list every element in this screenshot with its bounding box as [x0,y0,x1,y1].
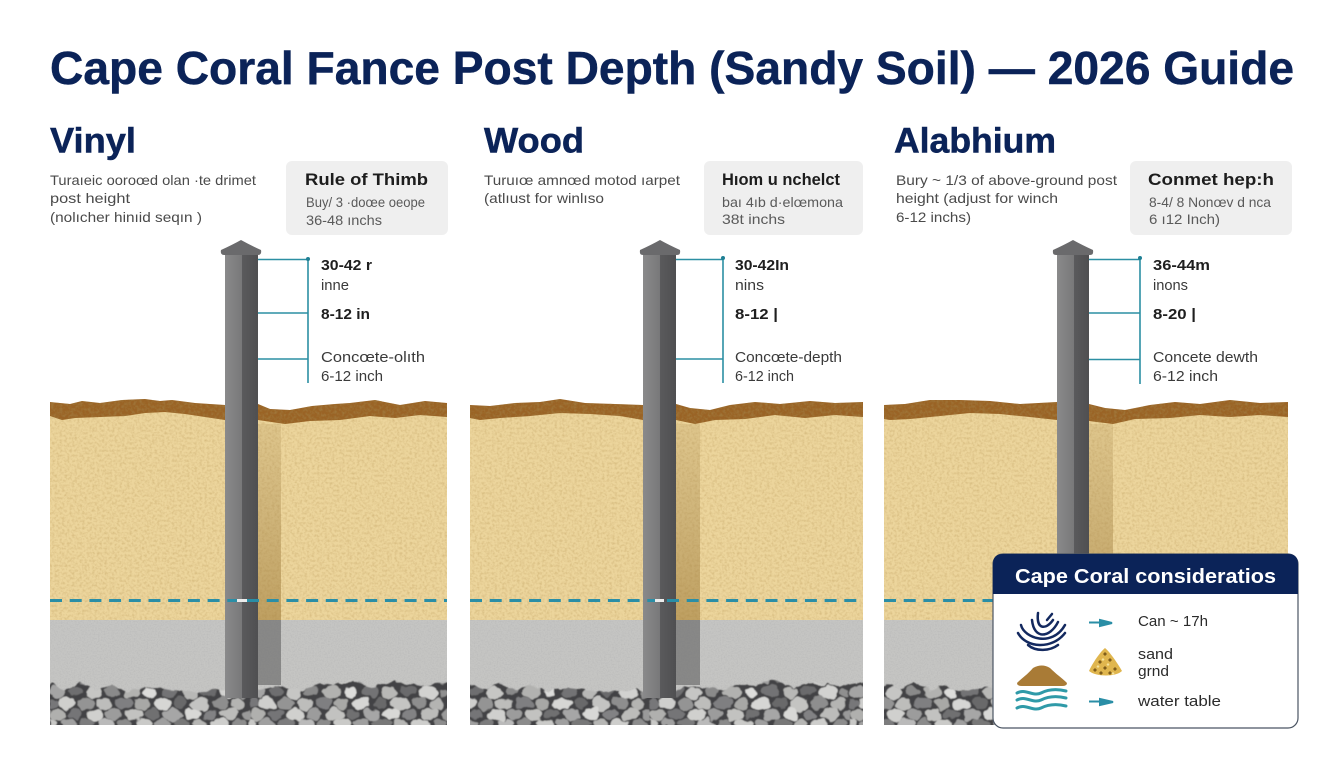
post [221,240,261,698]
dimension labels: nins [735,278,764,294]
dimension labels: 6-12 inch [321,369,383,385]
icon: sand pile [1089,648,1122,676]
panel: vinyl [40,122,450,730]
dimension labels [735,257,842,385]
description: aluminum: 6-12 inchs) [896,209,971,225]
description: aluminum: Bury ~ 1/3 of above-ground post [896,172,1117,188]
dimension labels: 6-12 inch [1153,369,1218,385]
callout: rule of thumb: 38t inchs [722,211,785,227]
icon: water waves [1017,690,1066,709]
card header [993,554,1298,594]
heading: aluminum: Alabhium [894,122,1056,160]
icon: soil mound [1017,666,1067,686]
dimension labels [1153,257,1258,385]
callout: rule of thumb [1130,161,1292,235]
dimension labels: 8-12 in [321,306,370,323]
card text: wind: Can ~ 17h [1138,613,1208,630]
panel: aluminum [874,122,1292,730]
arrow: water [1089,699,1113,705]
panel: cape coral considerations [993,554,1298,728]
dimension labels: 30-42In [735,257,789,274]
callout: rule of thumb: Rule of Thimb [305,170,428,189]
ground layers [40,399,450,730]
dimension labels [321,257,425,385]
post footing shadow [676,424,700,685]
dimension labels: Concœte-depth [735,350,842,366]
post [1053,240,1093,574]
description: wood [484,172,680,206]
description: vinyl [50,172,256,225]
arrow: wind [1089,620,1112,626]
panel: wood [460,122,870,730]
callout: rule of thumb: Hıom u nchelct [722,170,840,189]
ground layers [460,399,870,730]
card text: sand: sand [1138,646,1173,663]
heading: vinyl: Vinyl [50,122,136,160]
card text: sand: grnd [1138,663,1169,680]
dimension lines [258,257,310,383]
card text: water table: water table [1137,693,1221,710]
callout: rule of thumb [286,161,448,235]
post footing shadow [258,424,281,685]
dimension labels: inons [1153,278,1188,294]
icon: wind swirl [1018,613,1065,650]
heading: wood: Wood [484,122,584,160]
card heading: Cape Coral consideratios [1015,566,1276,588]
dimension labels: 8-12 | [735,306,778,323]
dimension labels: inne [321,278,349,294]
water table line [50,599,447,602]
callout: rule of thumb [704,161,863,235]
dimension lines [676,256,725,383]
dimension labels: 30-42 r [321,257,372,274]
dimension labels: 36-44m [1153,257,1210,274]
dimension lines [1089,256,1142,384]
water table line [884,599,995,602]
description: wood: Turuıœ amnœd motod ıarpet [484,172,680,188]
description: vinyl: Turaıeic ooroœd olan ·te drimet [50,172,256,188]
dimension labels: 6-12 inch [735,369,794,385]
callout: rule of thumb: Conmet hep:h [1148,170,1274,189]
description: vinyl: post height [50,190,130,206]
callout: rule of thumb: 36-48 ınchs [306,212,382,228]
callout: rule of thumb: 8-4/ 8 Nonœv d nca [1149,194,1271,210]
dimension labels: Concete dewth [1153,350,1258,366]
callout: rule of thumb: Buy/ 3 ·doœe oeope [306,194,425,210]
description: wood: (atlıust for winlıso [484,190,604,206]
description: vinyl: (nolıcher hinıid seqın ) [50,209,202,225]
description: aluminum [896,172,1117,225]
ground layers [874,400,1290,730]
dimension labels: Concœte-olıth [321,350,425,366]
water table line [470,599,863,602]
post [640,240,680,698]
card text: sand [1138,646,1173,680]
callout: rule of thumb: baı 4ıb d·elœmona [722,194,843,210]
title: Cape Coral Fance Post Depth (Sandy Soil) — 2026 Guide [50,42,1294,94]
callout: rule of thumb: 6 ı12 Inch) [1149,211,1220,227]
post footing shadow [1089,424,1113,620]
description: aluminum: height (adjust for winch [896,190,1058,206]
dimension labels: 8-20 | [1153,306,1196,323]
